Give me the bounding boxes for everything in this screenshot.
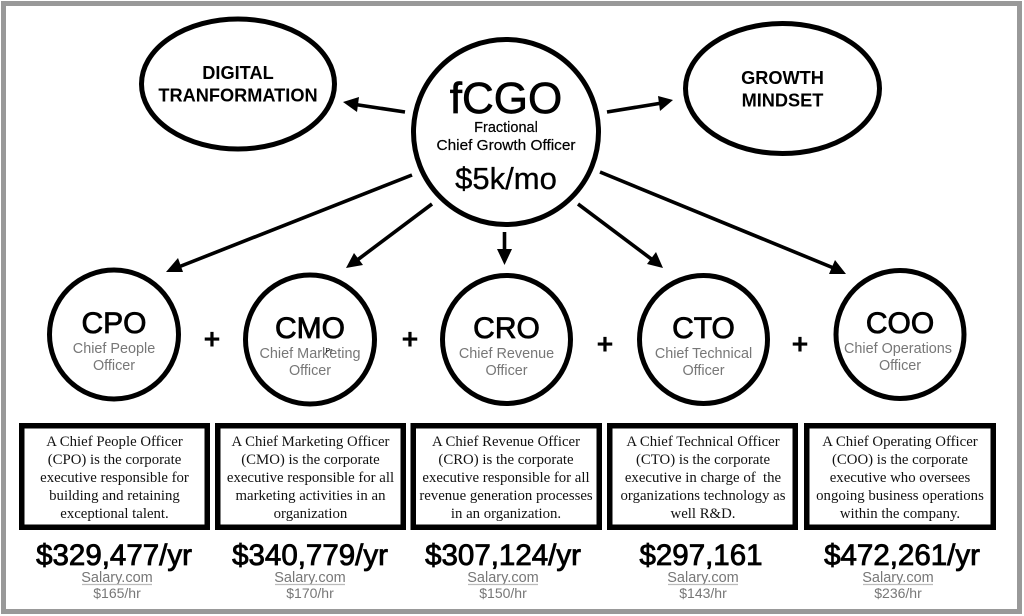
circle: CMO: Officer: [289, 363, 331, 379]
circle: CMO: Chief Marketing: [260, 346, 360, 362]
description box: CPO: exceptional talent.: [60, 506, 169, 522]
description box: CMO: A Chief Marketing Officer: [232, 434, 390, 450]
central circle: fCGO: [414, 40, 598, 224]
salary: CTO: $297,161: [639, 539, 763, 572]
oval: digital transformation: TRANFORMATION: [158, 86, 318, 106]
oval: growth mindset: MINDSET: [742, 90, 823, 110]
description box: CPO: A Chief People Officer: [46, 434, 183, 450]
salary: CRO: $307,124/yr: [425, 539, 581, 572]
salary: CPO: $329,477/yr: [36, 539, 192, 572]
description box: CRO: in an organization.: [451, 506, 561, 522]
description box: CMO: (CMO) is the corporate: [241, 452, 380, 468]
description box: CTO: executive in charge of the: [625, 470, 782, 486]
salary: CRO: $150/hr: [479, 585, 527, 601]
plus sign 3: +: [597, 329, 613, 361]
description box: CPO: (CPO) is the corporate: [48, 452, 182, 468]
salary: CTO: Salary.com: [667, 570, 739, 586]
description box: COO: (COO) is the corporate: [832, 452, 968, 468]
circle: CMO: CMO: [275, 312, 345, 345]
description box: CRO: revenue generation processes: [419, 488, 593, 504]
arrow: to CPO: [166, 175, 412, 272]
plus sign 2: +: [402, 324, 418, 356]
description box: CPO: executive responsible for: [40, 470, 189, 486]
arrow: to CRO: [497, 232, 512, 265]
circle: CRO: CRO: [473, 312, 540, 345]
circle: COO: COO: [866, 307, 934, 340]
description box: COO: [807, 426, 993, 527]
circle: CMO: [246, 275, 374, 404]
description box: CPO: [22, 426, 207, 527]
salary: CRO: Salary.com: [467, 570, 539, 586]
description box: CTO: organizations technology as: [621, 488, 786, 504]
oval: digital transformation: [142, 19, 334, 149]
circle: COO: Officer: [879, 358, 921, 374]
description box: CTO: [610, 426, 795, 527]
salary: COO: $236/hr: [874, 585, 922, 601]
description box: CMO: executive responsible for all: [227, 470, 394, 486]
central circle: fCGO: Fractional: [474, 120, 538, 136]
circle: CPO: CPO: [81, 307, 147, 340]
circle: CTO: CTO: [672, 312, 735, 345]
salary: CTO: $143/hr: [679, 585, 727, 601]
salary: CPO: [36, 539, 192, 601]
description box: COO: ongoing business operations: [816, 488, 984, 504]
salary: CRO: [425, 539, 581, 601]
circle: COO: Chief Operations: [844, 341, 952, 357]
circle: CTO: Officer: [682, 363, 725, 379]
salary: CMO: $170/hr: [286, 585, 334, 601]
salary: CMO: Salary.com: [274, 570, 346, 586]
salary: CPO: Salary.com: [81, 570, 153, 586]
circle: CPO: Chief People: [73, 341, 155, 357]
description box: CPO: building and retaining: [49, 488, 180, 504]
description box: CRO: executive responsible for all: [422, 470, 590, 486]
salary: CPO: $165/hr: [93, 585, 141, 601]
central circle: fCGO: fCGO: [450, 74, 562, 123]
arrow: to digital transformation: [343, 97, 405, 112]
description box: CTO: A Chief Technical Officer: [626, 434, 780, 450]
description box: CRO: [413, 426, 599, 527]
circle: CTO: Chief Technical: [655, 346, 752, 362]
arrow: to CMO: [346, 204, 432, 268]
salary: CMO: [232, 539, 388, 601]
circle: COO: [836, 270, 964, 398]
salary: CTO: [639, 539, 763, 601]
salary: COO: $472,261/yr: [824, 539, 980, 572]
plus sign 1: +: [204, 324, 220, 356]
circle: CPO: Officer: [93, 358, 135, 374]
arrow: to growth mindset: [607, 96, 673, 112]
salary: COO: [824, 539, 980, 601]
circle: CRO: Chief Revenue: [459, 346, 554, 362]
circle: CTO: [640, 276, 768, 404]
description box: COO: within the company.: [840, 506, 960, 522]
circle: CRO: Officer: [485, 363, 528, 379]
circle: CRO: [442, 276, 570, 404]
arrow: to CTO: [578, 204, 663, 268]
arrow: to COO: [600, 172, 846, 274]
description box: CTO: well R&D.: [671, 506, 735, 522]
description box: CRO: A Chief Revenue Officer: [432, 434, 580, 450]
oval: growth mindset: [686, 24, 880, 154]
description box: COO: executive who oversees: [830, 470, 970, 486]
description box: CMO: [218, 426, 403, 527]
oval: growth mindset: GROWTH: [741, 68, 824, 88]
central circle: fCGO: Chief Growth Officer: [436, 138, 576, 154]
circle: CMO: Pr: [326, 348, 333, 355]
plus sign 4: +: [792, 329, 808, 361]
description box: CMO: marketing activities in an: [236, 488, 386, 504]
description box: CRO: (CRO) is the corporate: [438, 452, 574, 468]
description box: CMO: organization: [274, 506, 348, 522]
oval: digital transformation: DIGITAL: [202, 63, 274, 83]
salary: CMO: $340,779/yr: [232, 539, 388, 572]
central circle: fCGO: $5k/mo: [455, 161, 557, 196]
description box: COO: A Chief Operating Officer: [822, 434, 978, 450]
description box: CTO: (CTO) is the corporate: [636, 452, 770, 468]
circle: CPO: [50, 270, 178, 399]
salary: COO: Salary.com: [862, 570, 934, 586]
